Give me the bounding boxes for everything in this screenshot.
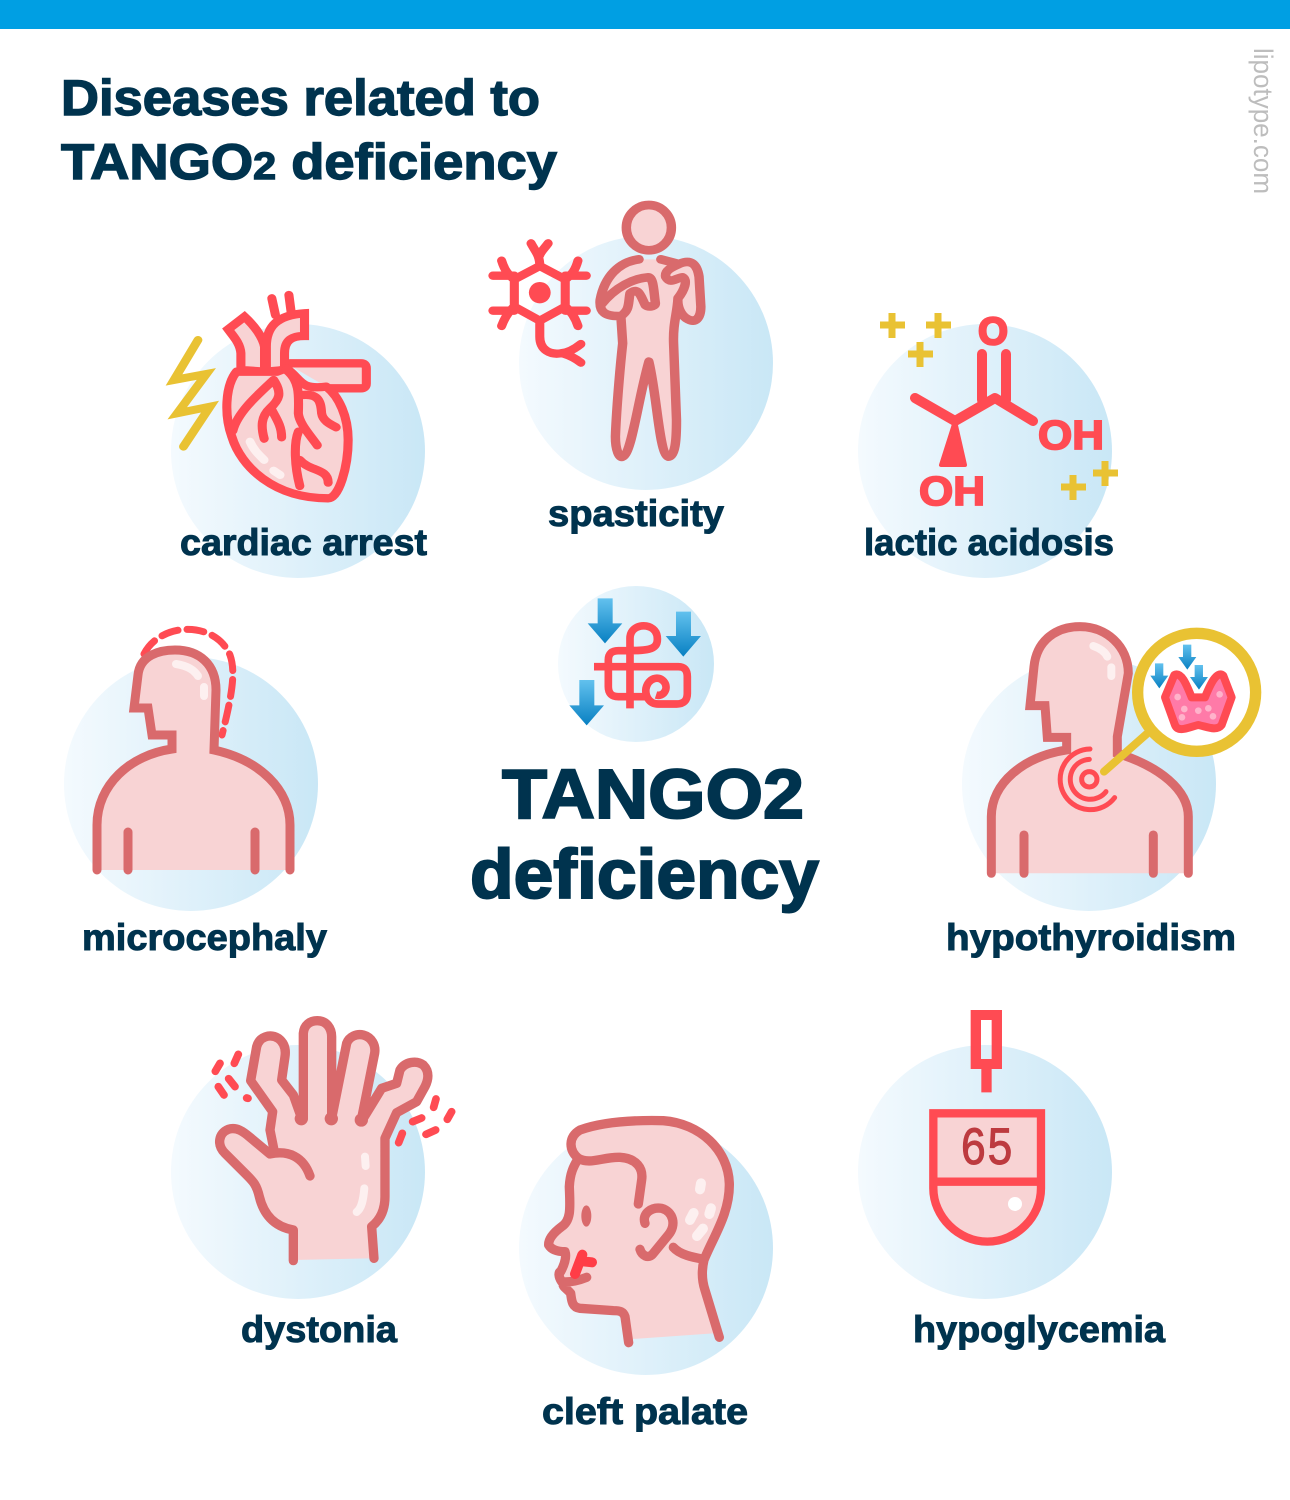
heading: TANGO2: [502, 755, 804, 833]
background circle: [858, 324, 1112, 578]
brand: lipotype.com: lipotype.com: [1248, 48, 1278, 194]
background circle: [858, 1045, 1112, 1299]
panel: TANGO2 deficiency centre: deficiency: [470, 835, 819, 913]
panel: hypothyroidism: [946, 627, 1256, 958]
panel: TANGO2 deficiency centre: [470, 586, 819, 913]
background circle: [64, 657, 318, 911]
icon: lactic acid molecule: OH: [919, 468, 985, 514]
label: cleft palate: [542, 1391, 748, 1432]
icon: glucose meter with lancet: 65: [960, 1121, 1013, 1181]
label: cardiac arrest: [180, 522, 427, 563]
top bar: [0, 0, 1290, 29]
icon: tangled protein with down arrows: [569, 598, 701, 725]
panel: lactic acidosis: [858, 311, 1118, 578]
icon: small head with dashed outline: [97, 629, 290, 870]
panel: cleft palate: [519, 1121, 773, 1432]
label: hypoglycemia: [913, 1309, 1165, 1350]
icon: lactic acid molecule: OH: [1038, 412, 1104, 458]
background circle: [171, 324, 425, 578]
icon: neuron and person: [493, 205, 701, 457]
icon: heart with lightning: [174, 295, 366, 498]
icon: head profile with cleft: [549, 1121, 729, 1343]
background circle: [558, 586, 714, 742]
title: [61, 70, 557, 190]
panel: spasticity: [493, 205, 773, 534]
background circle: [962, 657, 1216, 911]
icon: hand with tremor marks: [215, 1021, 452, 1261]
icon: glucose meter with lancet: [933, 1010, 1041, 1242]
panel: cardiac arrest: [171, 295, 427, 578]
icon: lactic acid molecule: O: [978, 311, 1008, 353]
label: microcephaly: [82, 917, 327, 958]
label: hypothyroidism: [946, 917, 1236, 958]
background circle: [519, 1121, 773, 1375]
panel: hypoglycemia: [858, 1010, 1165, 1350]
label: dystonia: [241, 1309, 397, 1350]
background circle: [519, 236, 773, 490]
panel: dystonia: [171, 1021, 452, 1350]
background circle: [171, 1045, 425, 1299]
panel: microcephaly: [64, 629, 327, 958]
icon: lactic acid molecule: [880, 311, 1118, 514]
title: Diseases related to: [61, 70, 540, 126]
icon: head, neck target, magnified thyroid: [991, 627, 1256, 873]
title: TANGO 2 deficiency: [61, 134, 557, 190]
label: spasticity: [548, 493, 724, 534]
label: lactic acidosis: [864, 522, 1114, 563]
